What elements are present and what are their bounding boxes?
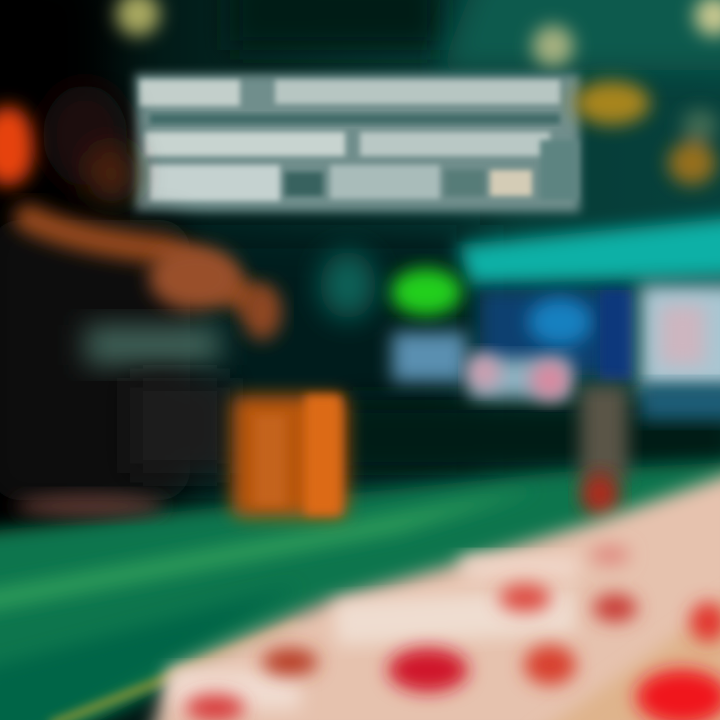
chip stack (232, 395, 347, 517)
green glow (320, 251, 462, 319)
bottle (580, 385, 628, 516)
card suit marks (185, 545, 720, 720)
red-orange light (0, 106, 36, 186)
person: head (43, 85, 136, 203)
person: arm and hand (28, 218, 282, 340)
playing cards (150, 470, 720, 720)
screen: blue panels (392, 290, 632, 400)
gold accents (574, 81, 718, 185)
person: torso (0, 220, 230, 500)
teal banner (458, 215, 720, 285)
screen: right chart panel (640, 285, 720, 420)
blurred red shape left (15, 494, 165, 518)
blurred title block (135, 74, 580, 212)
ceiling lights (116, 0, 720, 67)
table: green felt (0, 460, 720, 720)
